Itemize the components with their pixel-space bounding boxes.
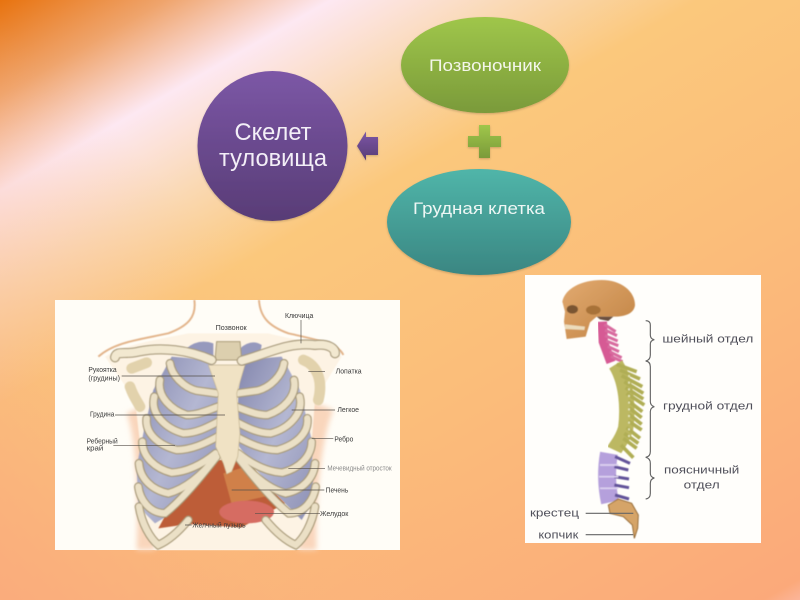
panel: chest illustration <box>55 300 400 550</box>
spine labels: крестец <box>530 508 580 520</box>
spine labels: шейный отдел <box>662 333 753 345</box>
arrow: left <box>357 132 378 160</box>
node: Скелет туловища <box>198 71 348 221</box>
panel: spine illustration <box>525 275 761 543</box>
chest labels: Мечевидный отросток <box>327 464 393 472</box>
ribs right <box>236 363 316 545</box>
chest labels: Лопатка <box>336 369 362 376</box>
chest labels: Легкое <box>337 407 359 414</box>
chest labels: Ребро <box>334 435 353 443</box>
chest labels: Желудок <box>320 511 349 518</box>
body outline <box>98 300 343 550</box>
liver and stomach <box>158 460 285 528</box>
spine labels: грудной отдел <box>663 401 753 413</box>
spine labels: копчик <box>538 529 580 541</box>
spine labels: отдел <box>684 479 720 491</box>
chest labels: Позвонок <box>216 325 248 332</box>
node: Грудная клетка: Грудная клетка <box>413 199 546 218</box>
node: Позвоночник <box>401 17 569 113</box>
clavicles and scapulae <box>115 344 335 407</box>
skull <box>562 280 635 339</box>
spine labels <box>530 333 753 541</box>
lungs <box>137 342 313 523</box>
sternum <box>208 365 245 474</box>
lumbar vertebrae <box>599 453 630 502</box>
thoracic vertebrae <box>614 364 644 458</box>
chest labels: (грудины) <box>88 375 120 382</box>
chest labels: Желчный пузырь <box>192 521 246 529</box>
chest labels: Реберный <box>87 437 118 445</box>
brackets <box>586 321 654 535</box>
chest labels: Печень <box>326 487 349 494</box>
icon: plus <box>468 125 501 158</box>
ribs left <box>138 363 218 545</box>
node: Грудная клетка <box>387 169 571 275</box>
vertebra <box>215 342 242 360</box>
node: Позвоночник: Позвоночник <box>429 56 542 75</box>
spine labels: поясничный <box>664 465 739 477</box>
node: Скелет туловища: туловища <box>219 145 328 172</box>
chest labels: Рукоятка <box>88 367 117 374</box>
chest labels: Грудина <box>90 412 114 419</box>
sacrum and coccyx <box>608 499 638 538</box>
cervical vertebrae <box>602 322 622 362</box>
node: Скелет туловища: Скелет <box>234 119 312 146</box>
chest labels: Ключица <box>285 313 313 320</box>
chest labels: край <box>87 445 103 453</box>
chest labels <box>87 313 393 529</box>
